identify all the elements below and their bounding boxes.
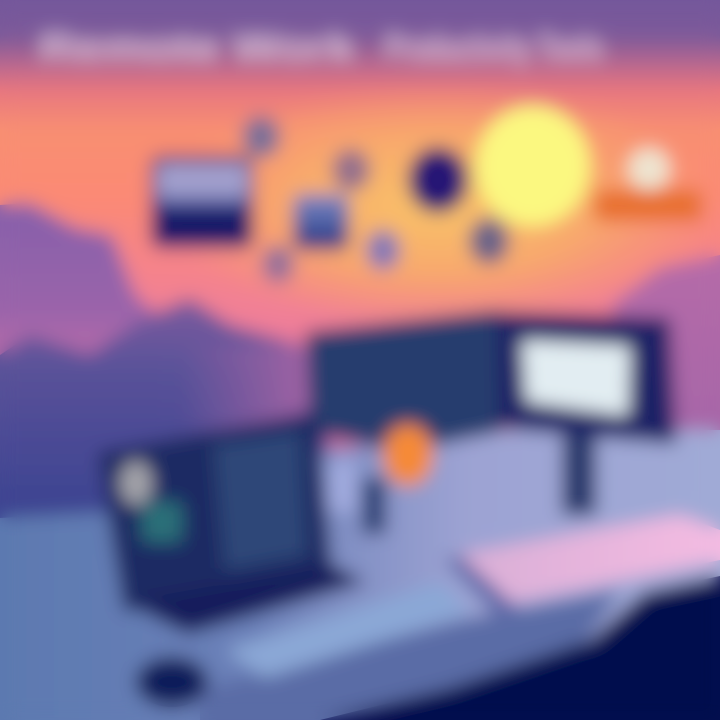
title: Remote Work xyxy=(40,27,356,69)
desk side shadow xyxy=(445,555,520,620)
sun xyxy=(476,106,590,226)
orange circle accent xyxy=(383,424,433,486)
main monitor xyxy=(496,312,676,515)
laptop app blocks xyxy=(120,461,152,505)
laptop xyxy=(98,412,366,634)
desk shadow band xyxy=(200,590,620,720)
floating photo card xyxy=(151,156,253,248)
dark desk corner xyxy=(320,576,720,720)
back mountains xyxy=(0,203,230,380)
cloud badge xyxy=(594,148,702,221)
keyboard pink pad xyxy=(455,515,720,602)
desk surface xyxy=(0,430,720,720)
mouse xyxy=(136,657,208,707)
floating circle icons xyxy=(242,116,509,283)
icon: lilac circle xyxy=(366,230,400,270)
icon: right circle xyxy=(469,218,509,264)
icon: small circle xyxy=(332,149,370,191)
horizon glow xyxy=(160,80,720,330)
front mountains xyxy=(0,298,330,530)
back monitor xyxy=(306,310,500,452)
icon: top circle xyxy=(242,116,280,158)
icon: square photo xyxy=(293,194,349,250)
icon: dark circle xyxy=(408,147,468,213)
icon: lower circle xyxy=(262,245,294,283)
title: Productivity Tools xyxy=(385,27,603,69)
title xyxy=(40,27,603,69)
light keyboard xyxy=(225,582,472,678)
right mountains xyxy=(612,255,720,450)
desk items xyxy=(328,460,386,534)
